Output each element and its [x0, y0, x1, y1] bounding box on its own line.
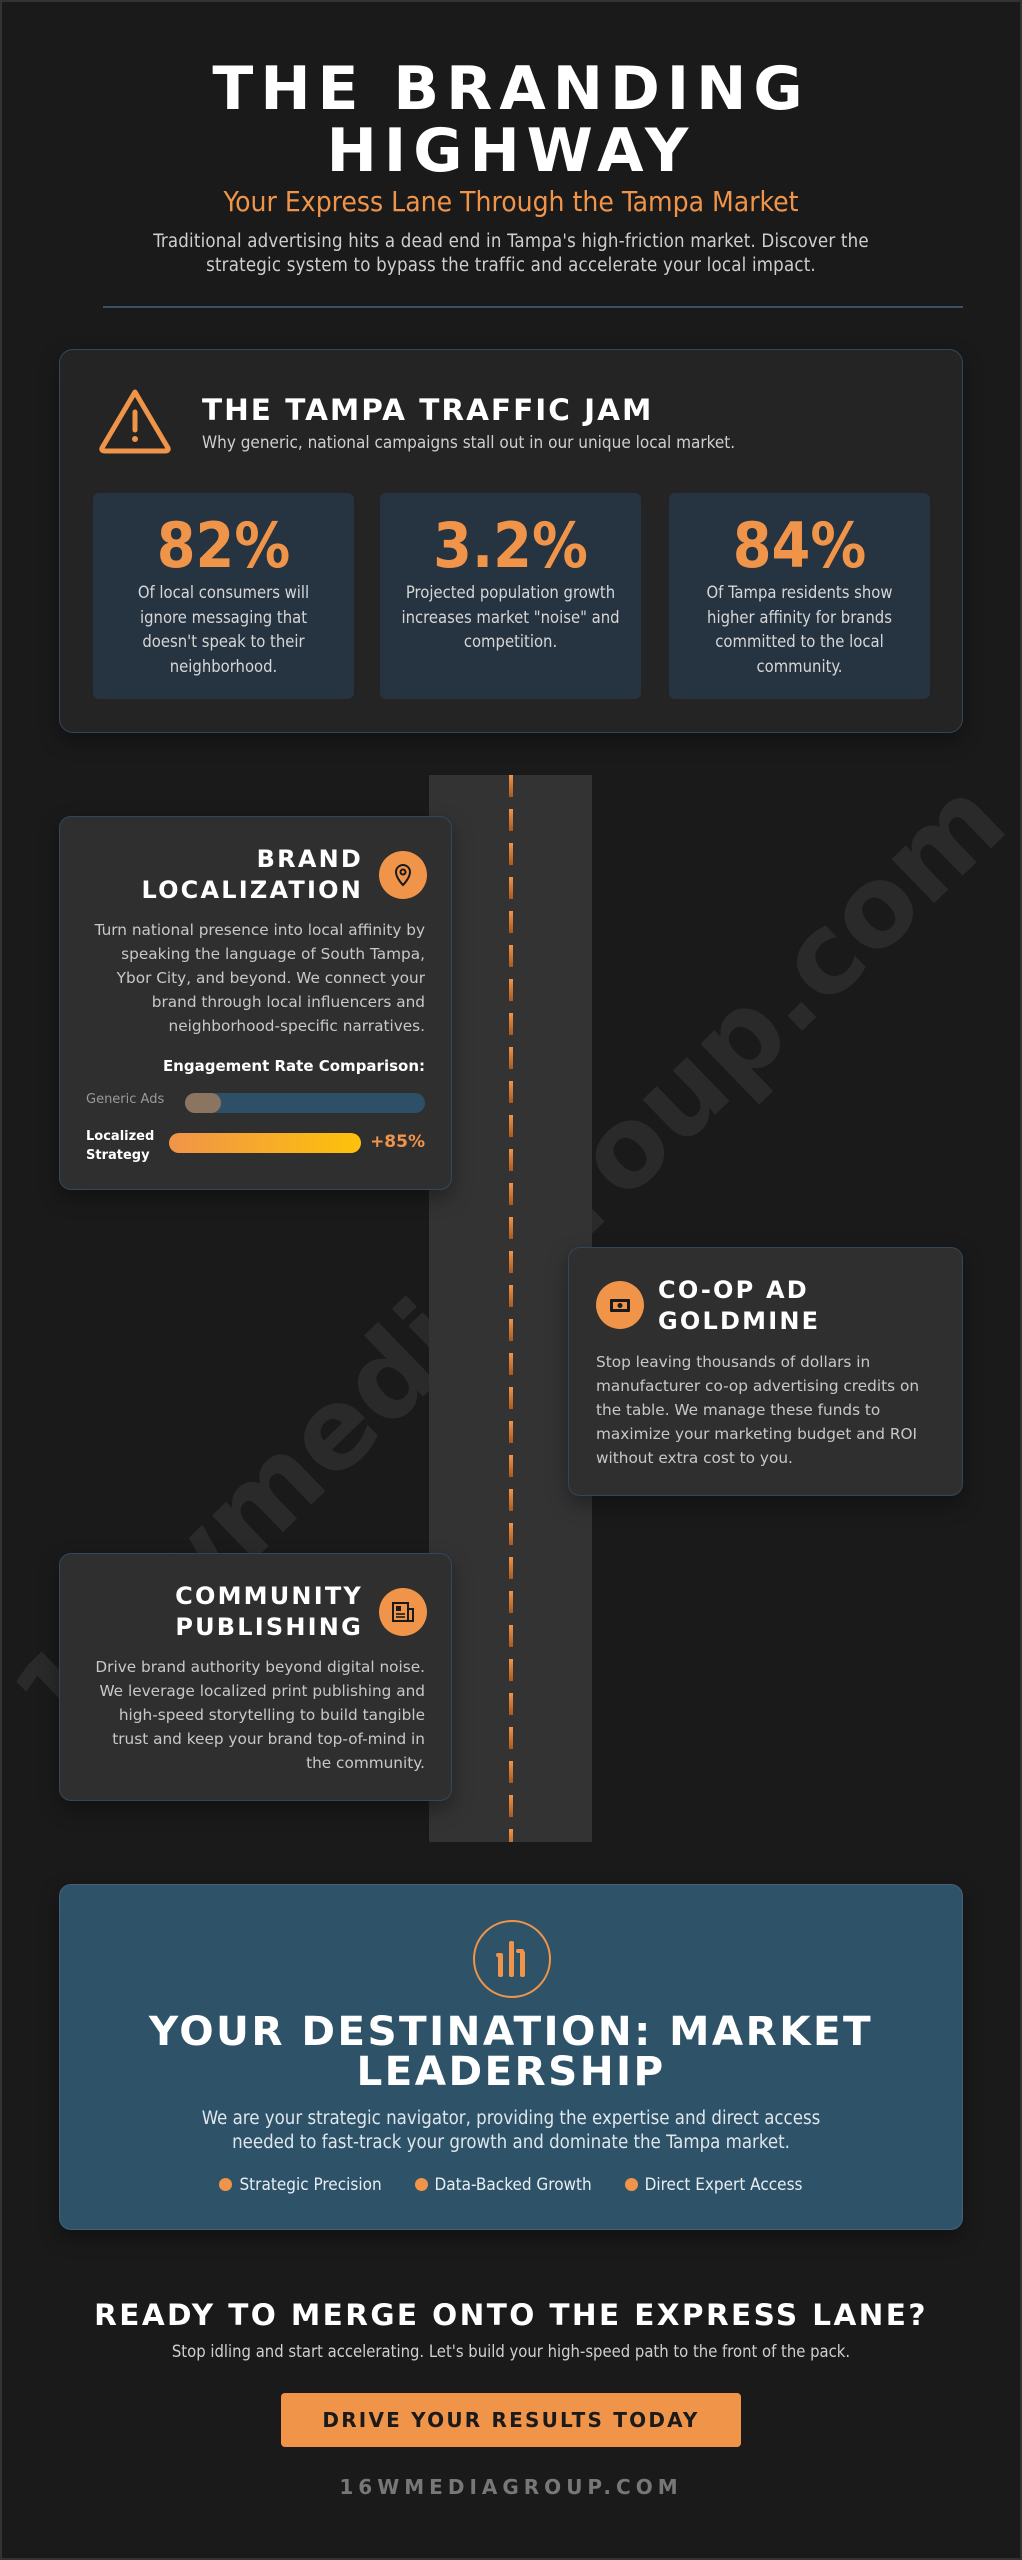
heading	[175, 1582, 363, 1641]
button: DRIVE YOUR RESULTS TODAY	[322, 2408, 700, 2432]
subheading: Why generic, national campaigns stall out in our unique local market.	[202, 433, 735, 453]
title: HIGHWAY	[327, 116, 695, 186]
heading: PUBLISHING	[175, 1613, 363, 1641]
button	[281, 2393, 741, 2447]
panel: community publishing	[59, 1553, 452, 1801]
checklist: Strategic Precision Data-Backed Growth Direct Expert Access	[239, 2175, 803, 2195]
stat 1	[93, 493, 354, 699]
icon: newspaper	[379, 1588, 427, 1636]
heading: COMMUNITY	[175, 1582, 363, 1610]
stat 1: Of local consumers will ignore messaging that doesn't speak to their neighborhood.	[138, 583, 309, 676]
stat 2: Projected population growth increases market "noise" and competition.	[401, 583, 620, 651]
heading	[141, 845, 363, 904]
panel: co-op ad goldmine	[568, 1247, 963, 1496]
stat 2: 3.2%	[433, 509, 588, 582]
bar chart: engagement: +85%	[370, 1132, 425, 1152]
stat 2	[380, 493, 641, 699]
heading: CO-OP AD	[658, 1276, 809, 1304]
icon: chart	[473, 1920, 551, 1998]
heading	[658, 1276, 820, 1335]
stat 3	[669, 493, 930, 699]
intro text: Traditional advertising hits a dead end in Tampa's high-friction market. Discover the strategic system to bypass the traffic and accelerate your local impact.	[153, 231, 869, 276]
panel: destination	[59, 1884, 963, 2230]
title	[212, 54, 810, 186]
bar chart: engagement	[86, 1057, 425, 1163]
heading: BRAND	[257, 845, 363, 873]
body text: Turn national presence into local affinity by speaking the language of South Tampa, Ybor City, and beyond. We connect your brand through local influencers and neighborhood-specific narratives.	[95, 921, 425, 1035]
cta heading: READY TO MERGE ONTO THE EXPRESS LANE?	[94, 2298, 928, 2332]
heading: THE TAMPA TRAFFIC JAM	[202, 393, 653, 427]
bar chart: engagement: Engagement Rate Comparison:	[163, 1057, 425, 1075]
icon: location pin	[379, 851, 427, 899]
body text: Drive brand authority beyond digital noise. We leverage localized print publishing and high-speed storytelling to build tangible trust and keep your brand top-of-mind in the community.	[95, 1658, 425, 1772]
bar chart: engagement: Strategy	[86, 1148, 150, 1163]
stat 3: 84%	[733, 509, 866, 582]
subtitle: Your Express Lane Through the Tampa Market	[223, 185, 799, 218]
panel: tampa traffic jam	[59, 349, 963, 733]
cta text: Stop idling and start accelerating. Let's build your high-speed path to the front of the pack.	[172, 2342, 850, 2361]
bar chart: engagement: Localized	[86, 1129, 154, 1144]
road	[429, 775, 592, 1842]
icon: warning	[99, 390, 171, 454]
stat 3: Of Tampa residents show higher affinity for brands committed to the local community.	[706, 583, 893, 676]
heading: GOLDMINE	[658, 1307, 820, 1335]
footer: 16WMEDIAGROUP.COM	[339, 2475, 683, 2499]
heading: LOCALIZATION	[141, 876, 363, 904]
heading: LEADERSHIP	[356, 2047, 666, 2095]
heading	[148, 2007, 873, 2095]
title: THE BRANDING	[212, 54, 810, 124]
body text: Stop leaving thousands of dollars in manufacturer co-op advertising credits on the table. We manage these funds to maximize your marketing budget and ROI without extra cost to you.	[596, 1353, 919, 1467]
icon: money	[596, 1281, 644, 1329]
bar chart: engagement: Generic Ads	[86, 1092, 164, 1107]
body text: We are your strategic navigator, providing the expertise and direct access needed to fast-track your growth and dominate the Tampa market.	[202, 2108, 820, 2153]
stat 1: 82%	[157, 509, 290, 582]
heading: YOUR DESTINATION: MARKET	[149, 2007, 873, 2055]
panel: brand localization	[59, 816, 452, 1190]
watermark: 16wmediagroup.com	[0, 754, 1022, 1766]
